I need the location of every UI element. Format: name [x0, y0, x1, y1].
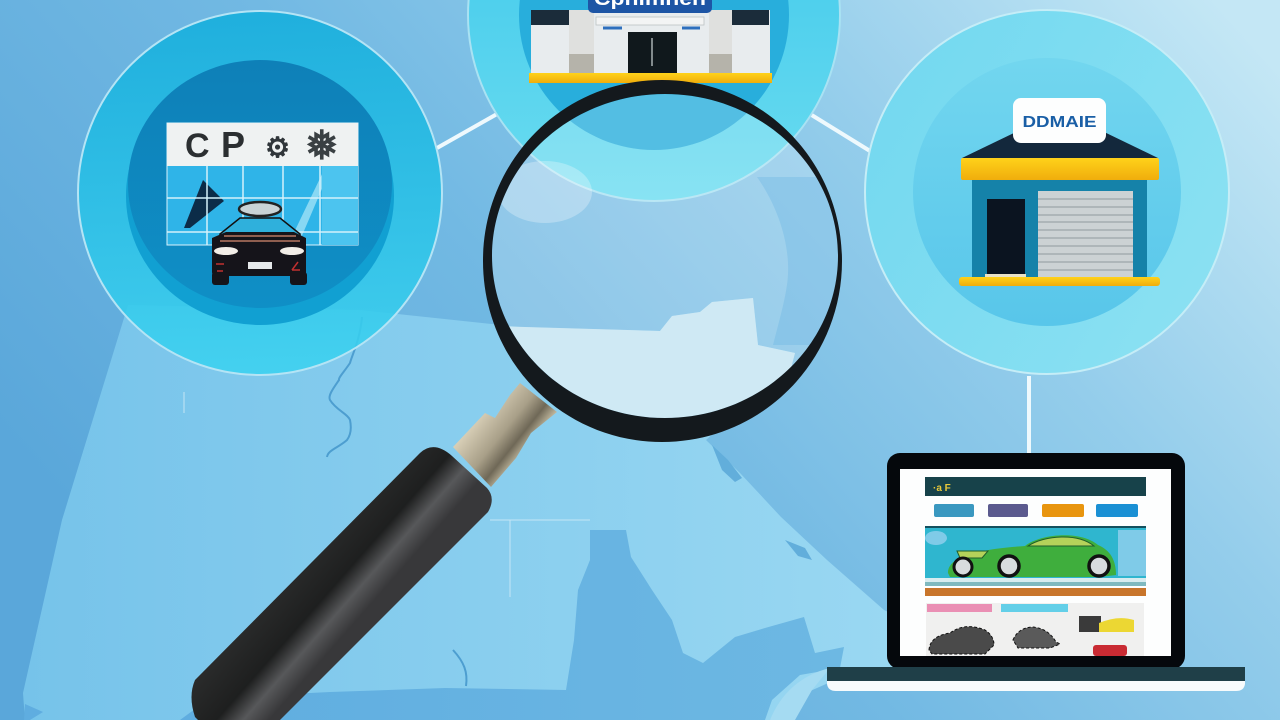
card grid area: [167, 123, 358, 245]
road orange stripe: [925, 588, 1146, 596]
windshield: [220, 218, 300, 242]
grille stripes: [220, 236, 300, 241]
panel: left circle, car directory: [78, 11, 442, 375]
card header: [167, 123, 358, 166]
directory card: [167, 123, 358, 245]
walls: [972, 180, 1147, 278]
card header letter: P: [221, 124, 245, 165]
handle grip: [192, 447, 492, 720]
peninsula: [770, 668, 830, 720]
garage building: [959, 98, 1160, 286]
dealership building: [529, 0, 772, 83]
yellow fascia: [961, 158, 1159, 180]
road teal stripe: [925, 582, 1146, 586]
connector right: [810, 114, 870, 151]
card gears icon: ❅: [305, 124, 339, 168]
inlets east: [712, 445, 812, 560]
road stripes: [925, 578, 1146, 596]
door: [987, 199, 1025, 274]
banner top edge: [925, 526, 1146, 528]
car windows: [957, 537, 1094, 558]
button orange: [1042, 504, 1084, 517]
car body: [948, 535, 1116, 577]
shutter slats: [1038, 199, 1133, 270]
roof sign: [239, 202, 281, 216]
laptop base dark: [827, 667, 1245, 681]
card grid lines: [167, 166, 358, 245]
circle core: [519, 0, 789, 150]
boundary lines: [184, 392, 590, 597]
lens highlight: [498, 161, 592, 223]
wheel middle: [999, 556, 1019, 576]
river south: [453, 650, 466, 686]
door step: [985, 274, 1026, 278]
sign: [1013, 98, 1106, 143]
door: [628, 32, 677, 73]
left headlight: [214, 247, 238, 255]
car icon: [212, 202, 307, 285]
pillar bases: [569, 54, 732, 73]
button purple: [988, 504, 1028, 517]
left wheel: [212, 272, 229, 285]
screen: [900, 469, 1171, 656]
hero banner with green car: [925, 526, 1146, 578]
lens rim: [483, 80, 842, 442]
lens tint: [492, 94, 838, 418]
connector left: [437, 114, 497, 148]
yellow car: [1099, 618, 1134, 632]
land mass: [23, 298, 905, 720]
panel: right circle, small garage: [865, 10, 1229, 374]
magnifying glass: [192, 80, 850, 720]
yellow base: [959, 277, 1160, 286]
panel: top circle, dealership: [468, 0, 840, 201]
lens darker crescent: [757, 177, 838, 345]
right dark window: [730, 10, 769, 25]
circle core: [913, 58, 1181, 326]
magnified land: [510, 298, 795, 418]
lens glass: [492, 94, 816, 418]
card header text: C: [185, 127, 210, 165]
site header: [925, 477, 1146, 496]
connector lines: [437, 114, 1029, 455]
road light stripe: [925, 578, 1146, 582]
car sketch one: [929, 627, 994, 654]
car sketch two: [1013, 627, 1060, 648]
car body: [212, 232, 306, 276]
plate: [248, 262, 272, 269]
connector down to laptop: [1027, 376, 1031, 455]
right wheel: [290, 272, 307, 285]
scenery left: [925, 531, 947, 545]
circle core: [128, 60, 392, 308]
laptop: [827, 453, 1245, 691]
button blue: [934, 504, 974, 517]
bay and coast water: [180, 530, 844, 720]
tail marks: [216, 262, 300, 271]
roof: [962, 130, 1158, 158]
header bar: [925, 477, 1146, 496]
red badge: [1093, 645, 1127, 656]
wheel right: [1089, 556, 1109, 576]
pink label: [927, 604, 992, 612]
sign board: [588, 0, 712, 13]
shutter: [1038, 191, 1133, 277]
center header: [596, 17, 704, 25]
button sky: [1096, 504, 1138, 517]
circle mid band: [126, 67, 394, 325]
window bars: [603, 26, 700, 30]
door handles: [651, 38, 653, 66]
map of region: [23, 298, 905, 720]
circle ring: [865, 10, 1229, 374]
right headlight: [280, 247, 304, 255]
circle ring: [78, 11, 442, 375]
circle ring: [468, 0, 840, 201]
dark sketch three: [1079, 616, 1101, 632]
metal collar: [453, 383, 557, 487]
nav buttons: [934, 504, 1138, 517]
card wrench icon: ⚙: [265, 132, 290, 163]
sign text: DDMAIE: [1022, 114, 1097, 131]
wheel left: [954, 558, 972, 576]
header logo: ·a F: [933, 483, 951, 494]
southwest corner water: [24, 704, 43, 720]
product listings: [926, 603, 1144, 656]
left dark window: [531, 10, 570, 25]
scenery right: [1118, 530, 1146, 576]
listing tile: [926, 603, 1144, 656]
pillars: [569, 10, 732, 73]
river: [327, 317, 362, 457]
card diagonal shapes: [184, 166, 358, 245]
laptop lid: [887, 453, 1185, 669]
banner background: [925, 526, 1146, 578]
laptop base white: [827, 681, 1245, 691]
yellow base: [529, 73, 772, 83]
blue label: [1001, 604, 1068, 612]
facade: [531, 10, 770, 73]
